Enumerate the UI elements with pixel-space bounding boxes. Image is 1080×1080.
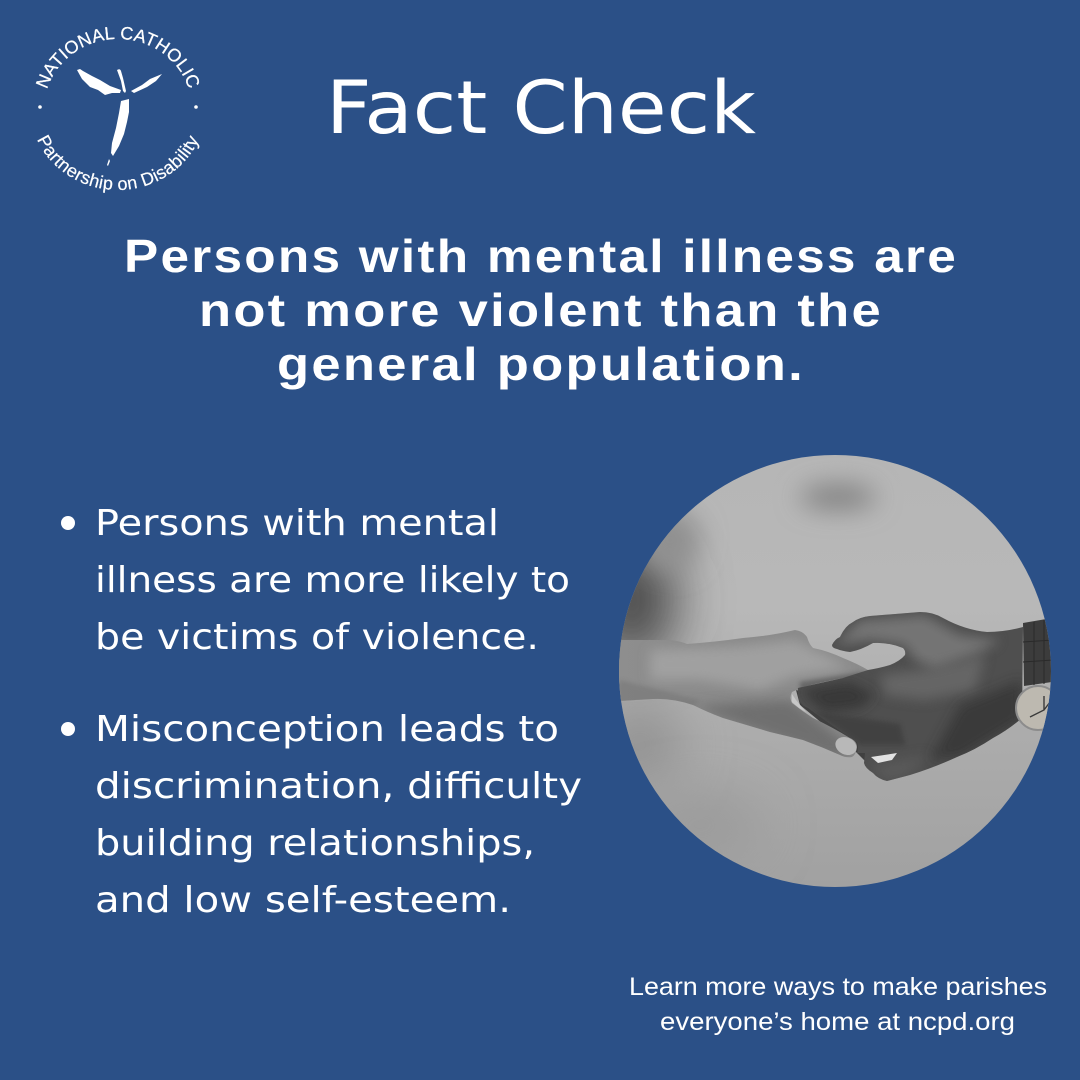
- title: Fact Check: [326, 66, 757, 151]
- bullet 1: Persons with mental: [95, 503, 499, 544]
- heading: Persons with mental illness are: [124, 230, 958, 282]
- heading: not more violent than the: [199, 284, 883, 336]
- shadow under fingers: [796, 690, 865, 760]
- gap between thumb and finger: [792, 694, 806, 712]
- heading: [124, 230, 958, 390]
- photo: two hands touching, in circle: [619, 455, 1051, 887]
- bullet 2: Misconception leads to: [95, 709, 559, 750]
- footer note: everyone’s home at ncpd.org: [660, 1008, 1015, 1036]
- photo backdrop: [619, 455, 1051, 887]
- right hand: [798, 612, 1023, 781]
- logo text: Partnership on Disability: Partnership on Disability: [37, 134, 200, 193]
- heading: general population.: [277, 338, 805, 390]
- logo: National Catholic Partnership on Disability: [36, 26, 200, 193]
- bullet 2: [61, 709, 582, 921]
- bullet 2: and low self-esteem.: [95, 880, 511, 921]
- footer note: Learn more ways to make parishes: [629, 973, 1047, 1001]
- bullet 1: [61, 503, 570, 658]
- bullet 2: discrimination, difficulty: [95, 766, 582, 807]
- watch: [1015, 619, 1051, 731]
- footer note: [629, 973, 1047, 1036]
- bullet list: [61, 503, 582, 921]
- left hand: [619, 630, 868, 758]
- thumbnail: [835, 737, 856, 755]
- bullet 2: building relationships,: [95, 823, 535, 864]
- logo figure: [77, 69, 162, 166]
- logo bullets: [38, 105, 198, 109]
- bullet 1: be victims of violence.: [95, 617, 539, 658]
- bullet 1: illness are more likely to: [95, 560, 570, 601]
- gap between fingers: [871, 753, 897, 763]
- logo text: National Catholic: NATIONAL CATHOLIC: [36, 26, 200, 88]
